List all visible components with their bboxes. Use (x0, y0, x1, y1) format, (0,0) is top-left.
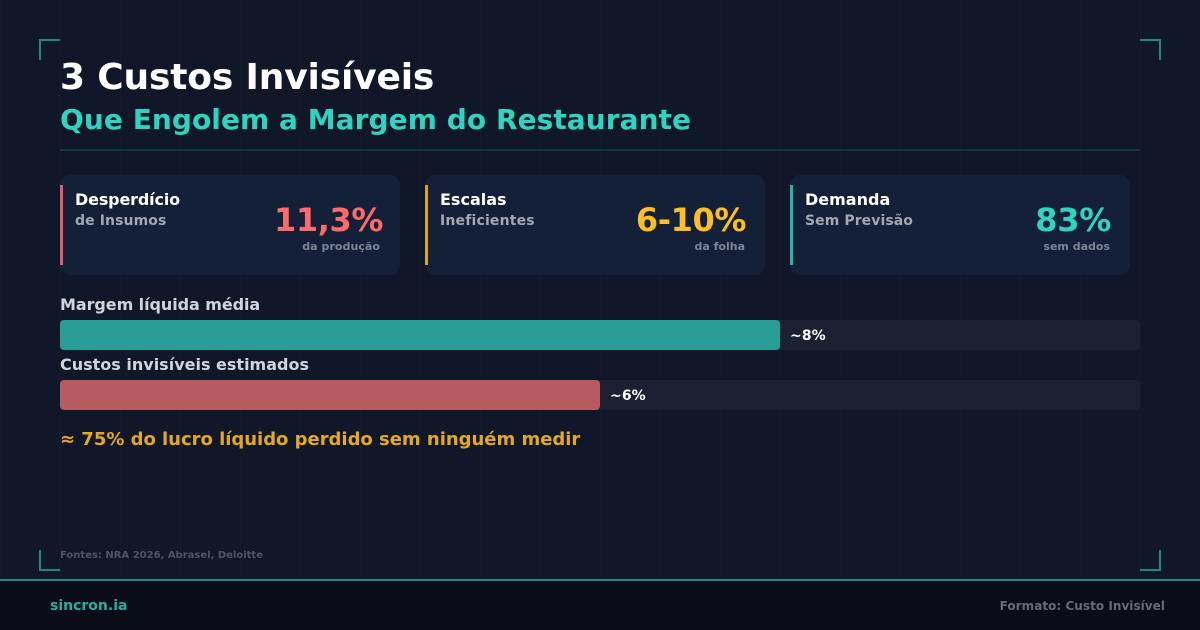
bar label: custos: Custos invisíveis estimados (60, 355, 309, 374)
bar chart row: custos ~6% (60, 380, 1140, 410)
panel: desperdício de insumos (60, 175, 400, 275)
brand: sincron.ia (50, 598, 127, 614)
card heading: Demanda (805, 190, 890, 209)
card heading: Desperdício (75, 190, 180, 209)
corner bracket: top right (1140, 39, 1161, 60)
corner bracket: bottom right (1140, 550, 1161, 571)
footer bar (0, 579, 1200, 630)
card subheading: Ineficientes (440, 213, 535, 229)
card statistic: 11,3% (274, 201, 383, 239)
accent bar: red (60, 185, 63, 265)
callout: ≈ 75% do lucro líquido perdido sem ninguém medir (60, 429, 580, 450)
bar fill: teal (60, 320, 780, 350)
header divider (60, 149, 1140, 151)
card heading: Escalas (440, 190, 507, 209)
card subheading: Sem Previsão (805, 213, 913, 229)
panel: escalas ineficientes (425, 175, 765, 275)
bar label: margem: Margem líquida média (60, 295, 260, 314)
corner bracket: top left (39, 39, 60, 60)
title: 3 Custos Invisíveis (60, 57, 434, 98)
card statistic caption: da folha (694, 240, 745, 253)
card statistic: 83% (1035, 201, 1111, 239)
corner bracket: bottom left (39, 550, 60, 571)
card statistic: 6-10% (636, 201, 746, 239)
bar chart row: margem ~8% (60, 320, 1140, 350)
card statistic caption: da produção (302, 240, 380, 253)
accent bar: amber (425, 185, 428, 265)
bar value: ~8% (790, 328, 826, 344)
format label: Formato: Custo Invisível (1000, 599, 1165, 613)
sources: Fontes: NRA 2026, Abrasel, Deloitte (60, 550, 263, 561)
accent bar: teal (790, 185, 793, 265)
bar fill: red (60, 380, 600, 410)
subtitle: Que Engolem a Margem do Restaurante (60, 103, 691, 136)
bar value: ~6% (610, 388, 646, 404)
panel: demanda sem previsão (790, 175, 1130, 275)
card statistic caption: sem dados (1043, 240, 1110, 253)
card subheading: de Insumos (75, 213, 166, 229)
